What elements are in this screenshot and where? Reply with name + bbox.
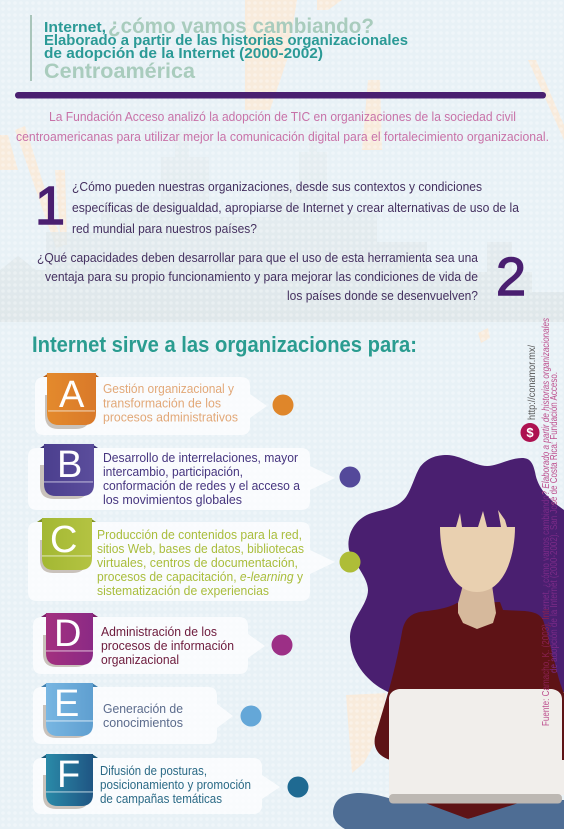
question 1: red mundial para nuestros países?: [72, 221, 257, 236]
question 1: ¿Cómo pueden nuestras organizaciones, desde sus contextos y condiciones: [72, 179, 482, 194]
bubble E: conocimientos: [103, 716, 183, 730]
title block: ¿cómo vamos cambiando?: [108, 15, 374, 38]
section heading: Internet sirve a las organizaciones para:: [32, 332, 417, 357]
hair: [348, 455, 564, 692]
bubble C: procesos de capacitación, e-learning y: [97, 570, 304, 584]
bubble A: [35, 373, 294, 435]
bubble C: C: [50, 519, 77, 561]
source citation: [541, 318, 560, 726]
bubble C: [28, 518, 360, 601]
bubble B: intercambio, participación,: [103, 465, 243, 479]
illustration: woman with laptop: [333, 455, 564, 829]
face: [440, 510, 515, 592]
question 2: ¿Qué capacidades deben desarrollar para que el uso de esta herramienta sea una: [37, 250, 479, 265]
legs: [333, 793, 564, 829]
bubble F: Difusión de posturas,: [100, 764, 207, 778]
bubble D: Administración de los: [101, 625, 217, 639]
laptop lid: [389, 689, 564, 795]
icon: source badge: $: [526, 425, 534, 440]
bubble F: de campañas temáticas: [100, 792, 222, 806]
background decoration: city skyline: [0, 127, 564, 322]
shirt: [375, 602, 564, 760]
shirt hem: [417, 800, 528, 819]
bubble C: sistematización de experiencias: [97, 584, 269, 598]
intro text: La Fundación Acceso analizó la adopción de TIC en organizaciones de la sociedad civil: [49, 109, 516, 124]
bubble A: A: [59, 374, 85, 416]
intro text: [16, 109, 549, 144]
bubble F: posicionamiento y promoción: [100, 778, 251, 792]
question 1: [35, 176, 520, 236]
bubble A: transformación de los: [103, 396, 221, 410]
bubble E: E: [54, 683, 79, 725]
bubble A: procesos administrativos: [103, 410, 238, 424]
question 1: 1: [35, 176, 65, 236]
url label: http://conamor.mx/: [526, 345, 538, 420]
bubble E: [33, 683, 262, 744]
bubble D: procesos de información: [101, 639, 234, 653]
bubble B: los movimientos globales: [103, 493, 242, 507]
bubble F: F: [57, 754, 80, 796]
bubble B: conformación de redes y el acceso a: [103, 479, 300, 493]
divider bar: [15, 92, 546, 98]
source citation: Fuente: Camacho, K. (2003). Internet, ¿cómo vamos cambiando? Elaborado a partir de historias organizacionales: [541, 318, 552, 726]
title block: Internet,: [44, 20, 106, 36]
source citation: de adopción de la Internet (2000-2002). San José de Costa Rica: Fundación Acceso.: [549, 372, 560, 673]
bubble B: [28, 444, 360, 510]
question 1: específicas de desigualdad, apropiarse de Internet y crear alternativas de uso de la: [72, 200, 520, 215]
laptop base: [389, 794, 562, 804]
bubble C: virtuales, centros de documentación,: [97, 556, 298, 570]
icon: source badge: [520, 423, 540, 442]
neck: [458, 585, 496, 629]
question 2: ventaja para su propio funcionamiento y para mejorar las condiciones de vida de: [45, 269, 478, 284]
bubble C: sitios Web, bases de datos, bibliotecas: [97, 542, 304, 556]
title block: Elaborado a partir de las historias organizacionales: [44, 32, 408, 49]
question 2: 2: [496, 247, 526, 307]
question 2: los países donde se desenvuelven?: [287, 288, 478, 303]
bubble D: D: [54, 613, 81, 655]
bubble D: organizacional: [101, 653, 179, 667]
bubble F: [33, 754, 308, 814]
title block: Centroamérica: [44, 60, 195, 83]
title block: de adopción de la Internet (2000-2002): [44, 45, 323, 62]
bubble C: Producción de contenidos para la red,: [97, 528, 302, 542]
bubble A: Gestión organizacional y: [103, 382, 235, 396]
bubble B: Desarrollo de interrelaciones, mayor: [103, 451, 298, 465]
bubble D: [33, 613, 292, 674]
question 2: [37, 247, 526, 307]
title block: [30, 15, 408, 83]
bubble E: Generación de: [103, 702, 183, 716]
bubble B: B: [57, 444, 82, 486]
